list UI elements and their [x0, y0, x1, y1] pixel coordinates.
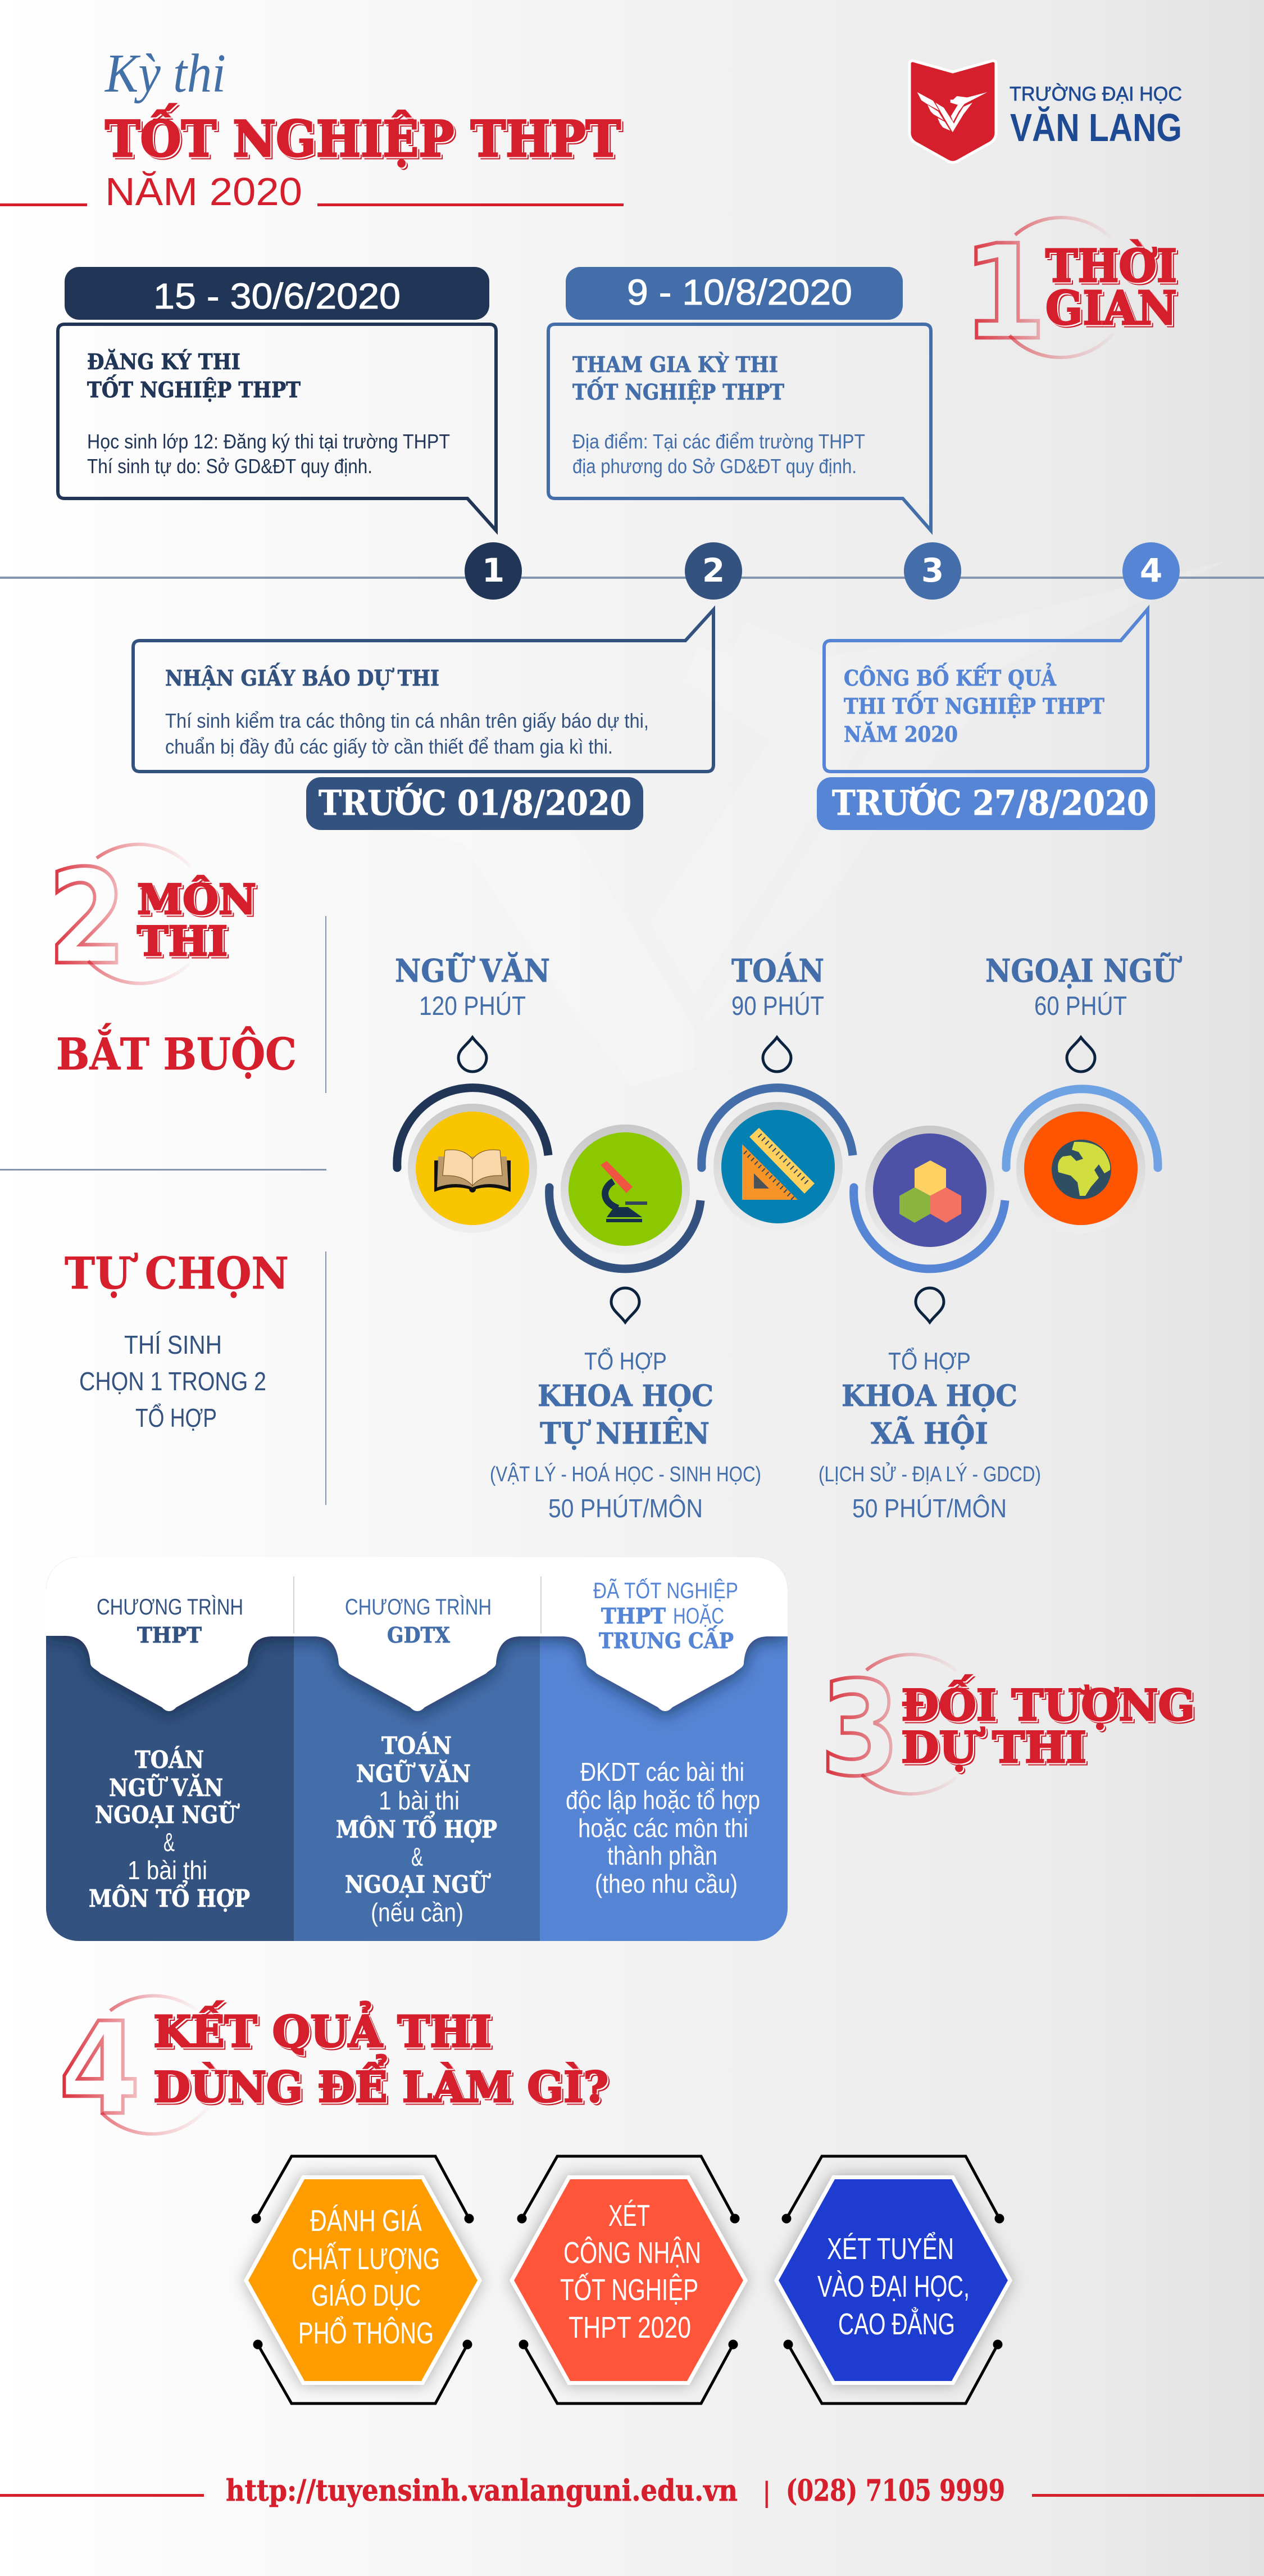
section heading: 2 môn thi: MÔN	[137, 876, 256, 924]
column: đã tốt nghiệp: thành phần	[607, 1841, 717, 1870]
column: đã tốt nghiệp: ĐÃ TỐT NGHIỆP	[593, 1577, 738, 1603]
column: chương trình THPT: TOÁN	[135, 1745, 204, 1774]
title script line: Kỳ thi	[104, 43, 226, 104]
column: chương trình GDTX: CHƯƠNG TRÌNH	[345, 1594, 492, 1620]
section heading: 4 kết quả thi: KẾT QUẢ THI	[153, 2001, 492, 2057]
column: chương trình THPT: &	[163, 1827, 175, 1857]
timeline step 4	[1122, 542, 1180, 600]
timeline step 2: 2	[702, 551, 725, 589]
section heading: 2 môn thi: 2	[48, 842, 126, 994]
footer contact: (028) 7105 9999	[786, 2474, 1005, 2508]
section heading: 1 thời gian: THỜI	[1045, 239, 1177, 292]
text: tổ hợp khoa học xã hội: TỔ HỢP	[888, 1346, 971, 1375]
callout: đăng ký thi: Học sinh lớp 12: Đăng ký thi tại trường THPT	[87, 430, 450, 453]
callout: đăng ký thi: TỐT NGHIỆP THPT	[87, 375, 301, 402]
callout: công bố kết quả: CÔNG BỐ KẾT QUẢ	[844, 663, 1056, 691]
text: tổ hợp khoa học tự nhiên: TỔ HỢP	[584, 1346, 667, 1375]
text: tổ hợp khoa học xã hội: 50 PHÚT/MÔN	[852, 1494, 1007, 1523]
panel: đối tượng dự thi	[46, 1557, 788, 1941]
logo name: VĂN LANG	[1010, 106, 1182, 149]
date pill: trước 27/8/2020	[817, 777, 1155, 830]
subject: ngữ văn	[395, 952, 550, 1021]
logo	[910, 61, 1182, 162]
section heading: 3 đối tượng dự thi: 3	[820, 1653, 900, 1805]
icon: globe	[1002, 1089, 1162, 1233]
column: chương trình GDTX	[336, 1594, 497, 1927]
callout: tham gia kỳ thi: THAM GIA KỲ THI	[572, 352, 778, 377]
column: chương trình GDTX: NGỮ VĂN	[356, 1759, 471, 1788]
hexagon: xét tuyển đại học	[774, 2156, 1012, 2403]
hexagon: xét công nhận tốt nghiệp: CÔNG NHẬN	[563, 2236, 701, 2270]
date pill: 9 - 10/8/2020: 9 - 10/8/2020	[627, 272, 852, 312]
callout: tham gia kỳ thi: địa phương do Sở GD&ĐT quy định.	[572, 455, 857, 478]
date pill: trước 27/8/2020: TRƯỚC 27/8/2020	[832, 782, 1149, 823]
text: tổ hợp khoa học tự nhiên: (VẬT LÝ - HOÁ HỌC - SINH HỌC)	[490, 1462, 761, 1486]
callout: tham gia kỳ thi: Địa điểm: Tại các điểm trường THPT	[572, 430, 865, 453]
text: tổ hợp khoa học tự nhiên	[490, 1346, 761, 1523]
text: tổ hợp khoa học xã hội	[819, 1346, 1041, 1523]
hexagon: xét công nhận tốt nghiệp: XÉT	[608, 2199, 650, 2233]
section heading: 3 đối tượng dự thi	[820, 1653, 1195, 1805]
column: đã tốt nghiệp: hoặc các môn thi	[578, 1813, 748, 1843]
column: chương trình THPT: 1 bài thi	[128, 1856, 207, 1885]
date pill: trước 01/8/2020: TRƯỚC 01/8/2020	[319, 782, 631, 823]
column: đã tốt nghiệp: ĐKDT các bài thi	[580, 1757, 744, 1786]
column: chương trình GDTX: TOÁN	[381, 1731, 452, 1759]
callout: công bố kết quả: THI TỐT NGHIỆP THPT	[844, 691, 1104, 719]
hexagon: đánh giá chất lượng: GIÁO DỤC	[311, 2279, 421, 2312]
hexagon: xét công nhận tốt nghiệp	[510, 2156, 748, 2403]
icon: microscope	[545, 1124, 701, 1269]
icon: hexagons	[849, 1126, 1005, 1269]
subject: ngữ văn: 120 PHÚT	[419, 991, 526, 1021]
section heading: 3 đối tượng dự thi: DỰ THI	[901, 1722, 1086, 1772]
section heading: 2 môn thi	[48, 842, 256, 994]
icon: pin toán	[763, 1037, 791, 1072]
footer contact: http://tuyensinh.vanlanguni.edu.vn	[226, 2474, 738, 2508]
hexagon: xét tuyển đại học: CAO ĐẲNG	[838, 2307, 955, 2341]
column: chương trình GDTX: GDTX	[387, 1622, 450, 1648]
text: thí sinh chọn 1 trong 2 tổ hợp: CHỌN 1 TRONG 2	[79, 1367, 266, 1396]
subject: toán: 90 PHÚT	[731, 991, 824, 1021]
column: chương trình THPT: CHƯƠNG TRÌNH	[97, 1594, 243, 1620]
column: chương trình THPT: MÔN TỔ HỢP	[89, 1879, 250, 1912]
column: đã tốt nghiệp	[566, 1577, 760, 1898]
hexagon: đánh giá chất lượng: CHẤT LƯỢNG	[292, 2242, 440, 2276]
callout: nhận giấy báo dự thi	[133, 610, 713, 772]
section heading: 4 kết quả thi	[59, 1996, 608, 2143]
hexagon: xét công nhận tốt nghiệp: THPT 2020	[569, 2311, 691, 2344]
column: đã tốt nghiệp: độc lập hoặc tổ hợp	[566, 1785, 760, 1815]
callout: nhận giấy báo dự thi: chuẩn bị đầy đủ các giấy tờ cần thiết để tham gia kì thi.	[165, 735, 613, 758]
logo name	[1010, 83, 1182, 149]
text: thí sinh chọn 1 trong 2 tổ hợp: THÍ SINH	[124, 1330, 222, 1359]
callout: đăng ký thi: ĐĂNG KÝ THI	[87, 349, 240, 374]
callout: tham gia kỳ thi: TỐT NGHIỆP THPT	[572, 377, 784, 405]
date pill: 9 - 10/8/2020	[566, 267, 903, 320]
text: tổ hợp khoa học tự nhiên: TỰ NHIÊN	[540, 1416, 710, 1451]
timeline step 3	[904, 542, 961, 600]
title	[0, 43, 624, 214]
timeline step 2	[685, 542, 742, 600]
text: tổ hợp khoa học xã hội: KHOA HỌC	[842, 1379, 1017, 1413]
timeline step 3: 3	[921, 551, 944, 589]
hexagon: xét tuyển đại học: VÀO ĐẠI HỌC,	[817, 2270, 970, 2303]
callout: công bố kết quả	[824, 609, 1148, 772]
callout: nhận giấy báo dự thi: NHẬN GIẤY BÁO DỰ THI	[165, 663, 439, 691]
hexagon: đánh giá chất lượng: PHỔ THÔNG	[298, 2316, 434, 2350]
timeline step 1: 1	[482, 551, 504, 589]
subject: ngoại ngữ: NGOẠI NGỮ	[985, 953, 1182, 990]
section heading: 2 môn thi: THI	[137, 917, 228, 965]
hexagon: đánh giá chất lượng	[244, 2156, 482, 2403]
subject: toán: TOÁN	[731, 953, 824, 990]
column: chương trình THPT	[89, 1594, 250, 1912]
icon: book	[393, 1088, 548, 1233]
text: tổ hợp khoa học xã hội: XÃ HỘI	[871, 1414, 988, 1451]
title main line: TỐT NGHIỆP THPT	[105, 104, 621, 168]
date pill: 15 - 30/6/2020	[65, 267, 489, 320]
column: đã tốt nghiệp: THPT	[601, 1603, 666, 1629]
callout: nhận giấy báo dự thi: Thí sinh kiểm tra các thông tin cá nhân trên giấy báo dự thi,	[165, 709, 649, 732]
column: đã tốt nghiệp: TRUNG CẤP	[599, 1626, 734, 1653]
column: chương trình GDTX: &	[411, 1842, 423, 1871]
section heading: 3 đối tượng dự thi: ĐỐI TƯỢNG	[901, 1675, 1195, 1730]
section heading: 1 thời gian	[962, 217, 1177, 369]
column: chương trình GDTX: NGOẠI NGỮ	[345, 1870, 491, 1898]
icon: set square and ruler	[698, 1088, 853, 1231]
label: tự chọn: TỰ CHỌN	[65, 1248, 289, 1299]
column: chương trình THPT: NGOẠI NGỮ	[95, 1801, 240, 1829]
column: chương trình GDTX: MÔN TỔ HỢP	[336, 1810, 497, 1843]
subject: ngữ văn: NGỮ VĂN	[395, 952, 550, 990]
logo name: TRƯỜNG ĐẠI HỌC	[1010, 83, 1182, 105]
text: tổ hợp khoa học tự nhiên: KHOA HỌC	[538, 1379, 713, 1413]
icon: shield	[910, 61, 996, 162]
text: thí sinh chọn 1 trong 2 tổ hợp	[79, 1330, 266, 1432]
timeline step 4: 4	[1140, 551, 1162, 589]
date pill: 15 - 30/6/2020: 15 - 30/6/2020	[153, 276, 401, 316]
callout: đăng ký thi: Thí sinh tự do: Sở GD&ĐT quy định.	[87, 455, 372, 478]
callout: tham gia kỳ thi	[548, 324, 931, 530]
subject: ngoại ngữ	[985, 953, 1182, 1021]
label: bắt buộc: BẮT BUỘC	[56, 1022, 297, 1080]
callout: công bố kết quả: NĂM 2020	[844, 722, 958, 747]
column: chương trình THPT: THPT	[137, 1622, 202, 1648]
icon: pin khoa học xã hội	[916, 1288, 944, 1322]
hexagon: xét công nhận tốt nghiệp: TỐT NGHIỆP	[560, 2273, 698, 2307]
hexagon: xét tuyển đại học: XÉT TUYỂN	[827, 2232, 954, 2266]
callout: đăng ký thi	[58, 324, 496, 530]
column: chương trình THPT: NGỮ VĂN	[109, 1773, 223, 1802]
text: thí sinh chọn 1 trong 2 tổ hợp: TỔ HỢP	[135, 1403, 217, 1432]
section heading: 1 thời gian: GIAN	[1045, 282, 1177, 335]
footer contact	[0, 2474, 1264, 2509]
timeline step 1	[465, 542, 522, 600]
column: chương trình GDTX: (nếu cần)	[371, 1898, 463, 1927]
section heading: 1 thời gian: 1	[962, 217, 1047, 369]
footer contact: |	[763, 2476, 771, 2509]
icon: pin ngữ văn	[458, 1037, 486, 1072]
text: tổ hợp khoa học tự nhiên: 50 PHÚT/MÔN	[548, 1494, 703, 1523]
icon: pin khoa học tự nhiên	[611, 1288, 639, 1322]
column: đã tốt nghiệp: HOẶC	[673, 1603, 724, 1629]
text: tổ hợp khoa học xã hội: (LỊCH SỬ - ĐỊA LÝ - GDCD)	[819, 1462, 1041, 1486]
section heading: 4 kết quả thi: 4	[59, 1996, 140, 2143]
column: đã tốt nghiệp: (theo nhu cầu)	[595, 1869, 738, 1898]
icon: pin ngoại ngữ	[1067, 1037, 1095, 1072]
date pill: trước 01/8/2020	[306, 777, 643, 830]
column: chương trình GDTX: 1 bài thi	[379, 1786, 460, 1815]
hexagon: đánh giá chất lượng: ĐÁNH GIÁ	[310, 2204, 422, 2238]
title year: NĂM 2020	[105, 170, 302, 214]
subject: toán	[731, 953, 824, 1021]
subject: ngoại ngữ: 60 PHÚT	[1034, 991, 1127, 1021]
section heading: 4 kết quả thi: DÙNG ĐỂ LÀM GÌ?	[153, 2055, 608, 2112]
